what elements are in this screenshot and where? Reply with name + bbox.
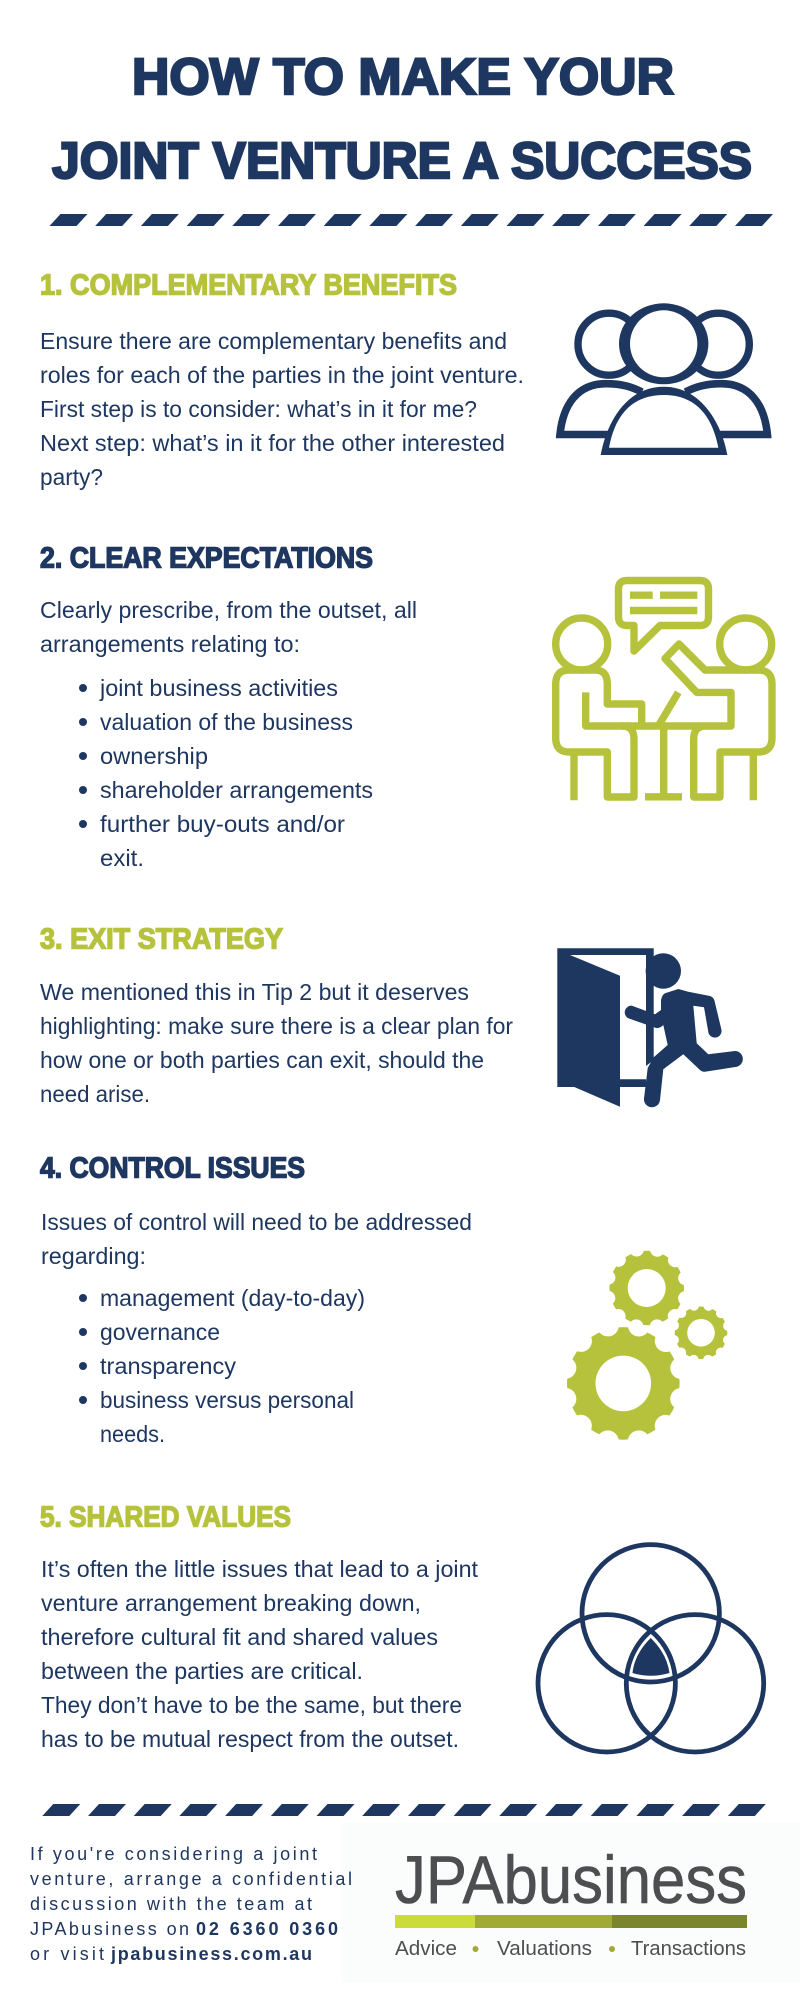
text block: shared values: It’s often the little issues that lead to a joint bbox=[41, 1556, 478, 1582]
text block: call to action: venture, arrange a confidential bbox=[30, 1869, 352, 1889]
logo: JPAbusiness: Advice bbox=[395, 1938, 457, 1960]
bullet list: control issues: management (day-to-day) bbox=[100, 1285, 365, 1311]
heading: complementary benefits: 1. COMPLEMENTARY BENEFITS bbox=[40, 270, 457, 302]
text block: call to action: If you're considering a joint bbox=[30, 1844, 317, 1864]
bullet list: clear expectations bbox=[79, 675, 373, 871]
text block: clear expectations intro: Clearly prescribe, from the outset, all bbox=[40, 597, 417, 623]
logo: JPAbusiness: Transactions bbox=[631, 1938, 746, 1960]
bullet list: control issues bbox=[79, 1285, 365, 1447]
bullet list: clear expectations: joint business activities bbox=[99, 675, 338, 701]
panel: 2. clear expectations bbox=[40, 542, 772, 871]
text block: complementary benefits: Next step: what’s in it for the other interested bbox=[40, 430, 505, 456]
text block: control issues intro: Issues of control will need to be addressed bbox=[41, 1209, 472, 1235]
heading: clear expectations: 2. CLEAR EXPECTATIONS bbox=[40, 542, 373, 574]
bullet list: control issues: transparency bbox=[100, 1353, 236, 1379]
icon: venn diagram bbox=[538, 1545, 764, 1752]
panel: 3. exit strategy bbox=[40, 924, 743, 1107]
text block: call to action: JPAbusiness on bbox=[30, 1919, 189, 1939]
bullet list: control issues: governance bbox=[100, 1319, 220, 1345]
text block: shared values: between the parties are critical. bbox=[41, 1658, 363, 1684]
text block: complementary benefits: roles for each of the parties in the joint venture. bbox=[40, 362, 524, 388]
text block: exit strategy: need arise. bbox=[40, 1081, 150, 1107]
logo: JPAbusiness: Valuations bbox=[497, 1938, 592, 1960]
icon: three people bbox=[560, 303, 767, 455]
bullet list: clear expectations: shareholder arrangements bbox=[100, 777, 373, 803]
text block: shared values: has to be mutual respect from the outset. bbox=[41, 1726, 459, 1752]
text block: call to action: discussion with the team at bbox=[30, 1894, 312, 1914]
text block: call to action: jpabusiness.com.au bbox=[110, 1944, 312, 1964]
text block: exit strategy: how one or both parties can exit, should the bbox=[40, 1047, 484, 1073]
text block: exit strategy: highlighting: make sure there is a clear plan for bbox=[40, 1013, 513, 1039]
text block: shared values: They don’t have to be the same, but there bbox=[41, 1692, 462, 1718]
logo: JPAbusiness bbox=[342, 1823, 800, 1983]
bullet list: control issues: business versus personal bbox=[100, 1387, 354, 1413]
text block: exit strategy: We mentioned this in Tip 2 but it deserves bbox=[40, 979, 469, 1005]
text block: exit strategy bbox=[40, 979, 513, 1107]
icon: three gears bbox=[566, 1250, 728, 1440]
text block: shared values: therefore cultural fit and shared values bbox=[41, 1624, 438, 1650]
bullet list: control issues: needs. bbox=[100, 1421, 165, 1447]
heading: exit strategy: 3. EXIT STRATEGY bbox=[40, 924, 283, 956]
icon: two people talking at a table bbox=[556, 580, 772, 800]
heading: shared values: 5. SHARED VALUES bbox=[40, 1502, 291, 1534]
text block: call to action bbox=[30, 1844, 352, 1964]
panel: 1. complementary benefits bbox=[40, 270, 767, 490]
text block: call to action: 02 6360 0360 bbox=[196, 1919, 338, 1939]
text block: complementary benefits: Ensure there are complementary benefits and bbox=[40, 328, 507, 354]
text block: shared values bbox=[41, 1556, 478, 1752]
text block: complementary benefits bbox=[40, 328, 524, 490]
panel: 5. shared values bbox=[40, 1502, 764, 1752]
text block: call to action: or visit bbox=[30, 1944, 104, 1964]
text block: clear expectations intro bbox=[40, 597, 417, 657]
text block: shared values: venture arrangement breaking down, bbox=[41, 1590, 421, 1616]
bullet list: clear expectations: exit. bbox=[100, 845, 144, 871]
icon: person running out of a door bbox=[557, 948, 743, 1107]
title: JOINT VENTURE A SUCCESS bbox=[52, 132, 752, 189]
text block: clear expectations intro: arrangements relating to: bbox=[40, 631, 300, 657]
bullet list: clear expectations: further buy-outs and/or bbox=[100, 811, 345, 837]
heading: control issues: 4. CONTROL ISSUES bbox=[40, 1152, 305, 1184]
text block: control issues intro: regarding: bbox=[41, 1243, 146, 1269]
panel: 4. control issues bbox=[40, 1152, 728, 1447]
title: HOW TO MAKE YOUR bbox=[132, 48, 674, 105]
logo: JPAbusiness: JPAbusiness bbox=[395, 1842, 747, 1918]
text block: control issues intro bbox=[41, 1209, 472, 1269]
text block: complementary benefits: party? bbox=[40, 464, 103, 490]
bullet list: clear expectations: ownership bbox=[100, 743, 208, 769]
text block: complementary benefits: First step is to consider: what’s in it for me? bbox=[40, 396, 477, 422]
bullet list: clear expectations: valuation of the business bbox=[100, 709, 353, 735]
title bbox=[52, 48, 752, 189]
